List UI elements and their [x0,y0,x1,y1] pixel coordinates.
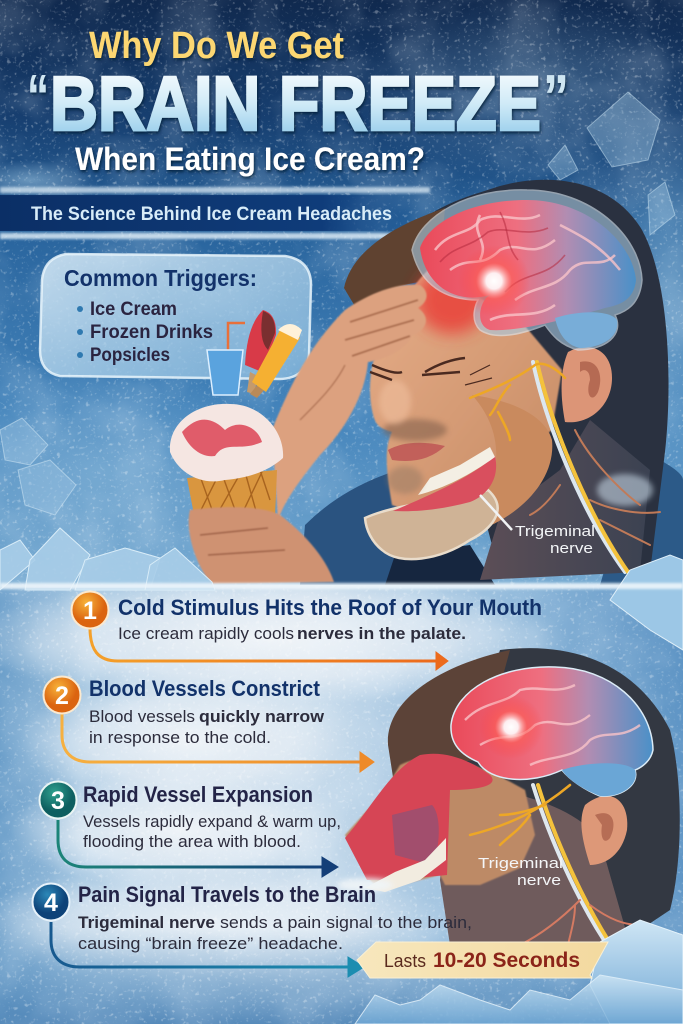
title: when eating ice cream: When Eating Ice Cream? [75,141,425,177]
head silhouette and hair [400,180,669,575]
arrow 3 [58,820,338,877]
label: trigeminal nerve: nerve [517,872,561,889]
triggers heading: Common Triggers: [64,265,257,291]
description 4 [78,914,472,953]
arrow 1 [90,628,448,670]
panel: common triggers [40,254,311,398]
callout: lasts 10-20 seconds: Lasts [384,951,426,971]
badge 1 [72,592,108,628]
front hair [344,208,445,308]
description 3 [83,813,341,851]
subtitle banner: The Science Behind Ice Cream Headaches [31,204,392,225]
arm and hand on forehead [272,285,427,520]
background: frosty upper scene [0,0,683,590]
brain [451,667,653,796]
arrow 2 [62,714,374,772]
triggers list: Popsicles [90,345,170,366]
callout: lasts 10-20 seconds: 10-20 Seconds [433,949,580,972]
icon: frozen drink and popsicles [207,310,302,398]
subtitle banner [0,187,430,239]
heading 3: Rapid Vessel Expansion [83,782,313,807]
lips and stubble [388,443,445,461]
label: trigeminal nerve [478,855,563,889]
heading 1: Cold Stimulus Hits the Roof of Your Mouth [118,595,542,620]
description 1: nerves in the palate. [297,625,466,643]
hand holding cone [189,507,334,584]
teeth [418,447,495,495]
ear [581,796,627,865]
shirt [300,472,490,585]
description 1: Ice cream rapidly cools [118,625,294,643]
callout: lasts 10-20 seconds [357,942,608,978]
title: brain freeze: BRAIN FREEZE [50,61,541,147]
illustration: side head cross-section [337,648,680,950]
label pointer line [480,495,512,530]
badge 3: 3 [51,787,65,815]
badge 3 [40,782,76,818]
description 2: in response to the cold. [89,729,271,747]
description 3: flooding the area with blood. [83,833,301,851]
ice chunks upper right [548,92,675,235]
eye and brow wrinkles [370,358,492,385]
label: trigeminal nerve: Trigeminal [478,855,563,872]
forehead red glow [416,266,488,334]
description 3: Vessels rapidly expand & warm up, [83,813,341,831]
heading 4: Pain Signal Travels to the Brain [78,882,376,907]
open mouth [345,754,493,880]
description 4: Trigeminal nerve [78,914,215,932]
ear [562,347,612,422]
teeth [365,838,446,892]
description 4: sends a pain signal to the brain, [220,914,472,932]
frost on neck [597,474,653,506]
tongue [392,805,439,865]
hair and back of head [460,648,680,950]
illustration: man with brain freeze [0,180,683,590]
description 1 [118,625,466,643]
badge 2 [44,676,80,714]
neck with nerves [480,420,650,580]
background: pale icy lower section [0,575,683,1024]
description 2 [89,708,324,747]
ice rock upper left [0,418,76,515]
nose highlight [379,380,411,424]
badge 4 [32,884,70,920]
label: trigeminal nerve: nerve [550,540,593,557]
badge 4: 4 [44,889,58,917]
badge 2: 2 [55,682,69,710]
brain [412,190,642,350]
triggers list [77,299,213,366]
lower jaw [365,490,498,559]
title: brain freeze: ” [543,63,569,132]
description 4: causing “brain freeze” headache. [78,935,343,953]
triggers list: Ice Cream [90,299,177,320]
trigeminal nerve [470,785,640,945]
cheek cutaway [440,395,552,530]
arrow 4 [51,922,364,977]
step 1 [72,592,542,670]
heading 2: Blood Vessels Constrict [89,676,321,701]
label: trigeminal nerve: Trigeminal [515,523,595,540]
description 2: quickly narrow [199,708,324,726]
frost divider [0,583,683,589]
ice rocks left [0,528,215,590]
front hair [388,650,510,790]
triggers list: Frozen Drinks [90,322,213,343]
face cross section [345,758,535,890]
title: brain freeze: “ [27,63,49,132]
step 2 [44,676,374,772]
skin neck and cheek [440,780,630,945]
description 2: Blood vessels [89,708,195,726]
ice chunks bottom [355,920,683,1024]
trigeminal nerve [470,362,660,572]
step 4 [32,882,472,977]
mouth [393,456,496,511]
chin frost [337,878,393,892]
step 3 [40,782,341,877]
ice cream cone [170,404,283,520]
ice chunk right middle [610,555,683,650]
badge 1: 1 [83,597,97,625]
label: trigeminal nerve [515,523,595,557]
face [370,270,562,515]
title: why do we get: Why Do We Get [89,25,344,67]
